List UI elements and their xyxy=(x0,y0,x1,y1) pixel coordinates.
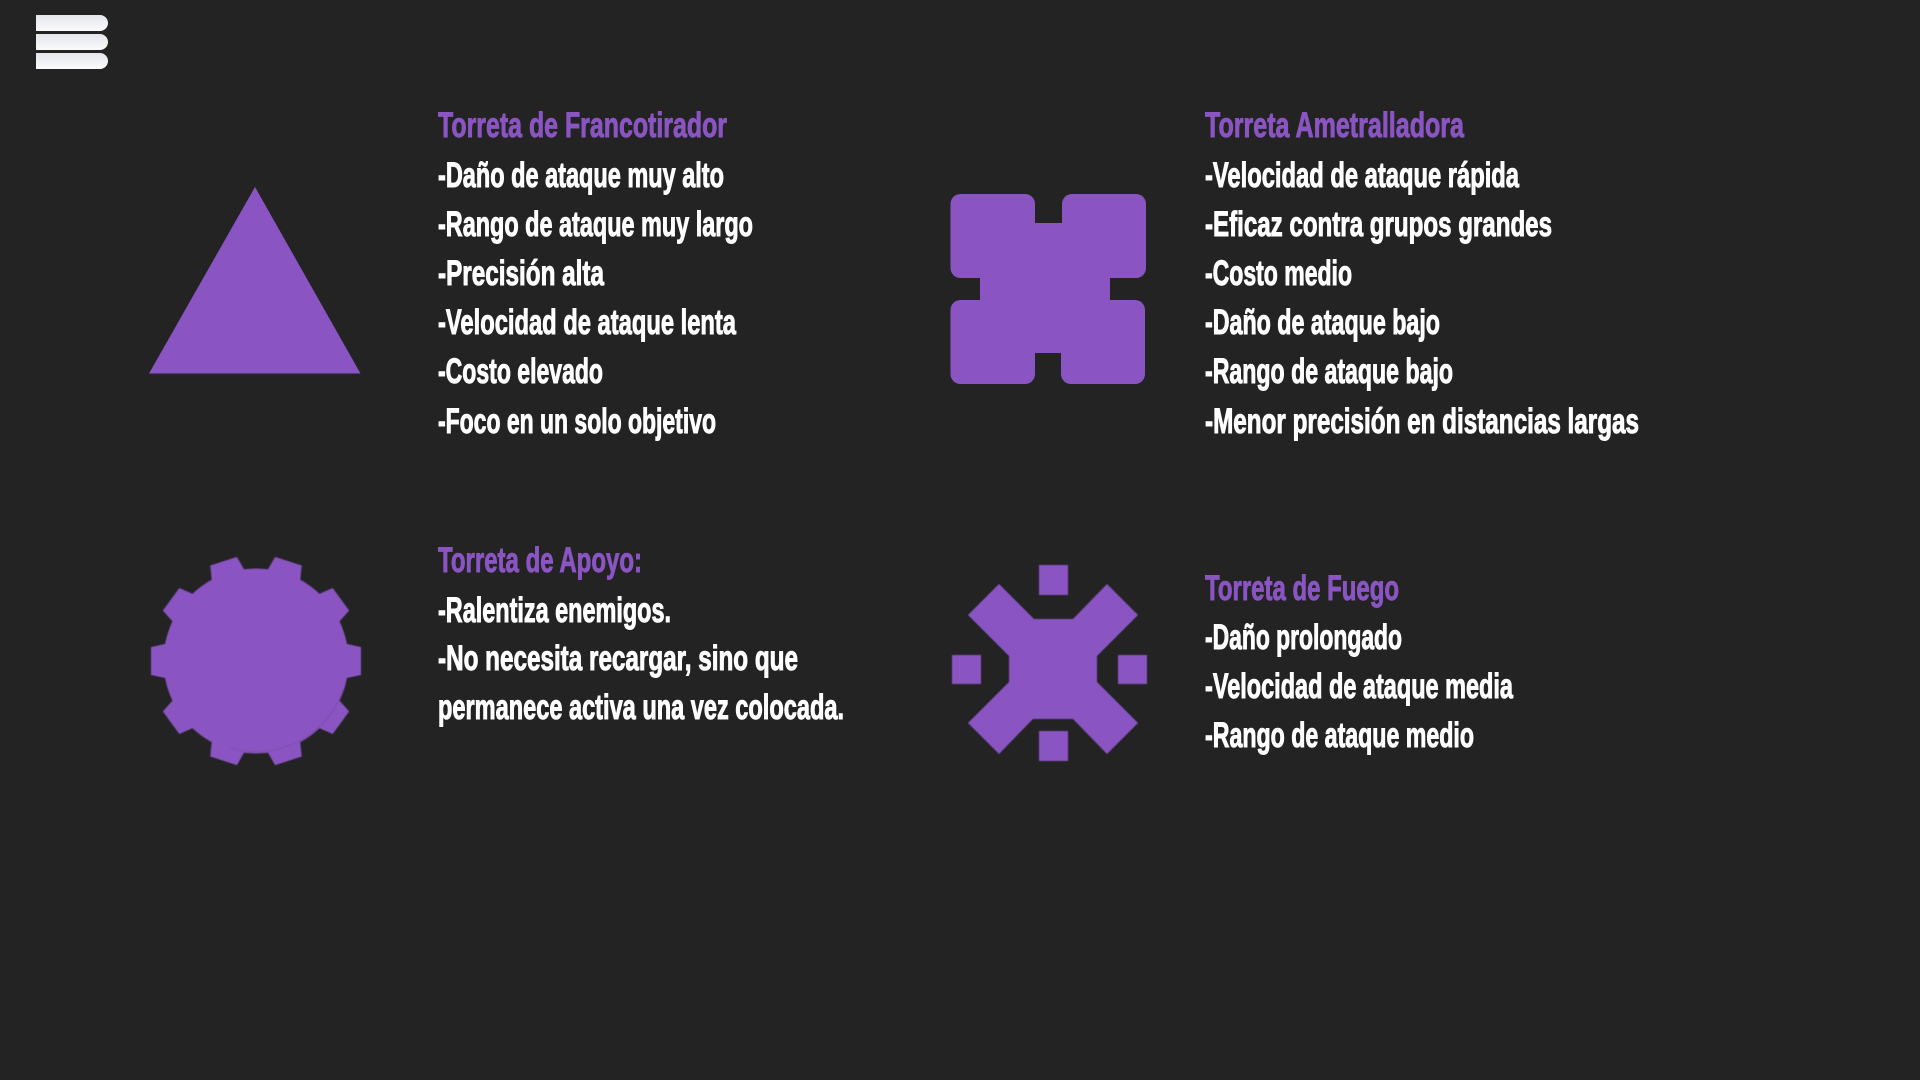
panel: support turret xyxy=(151,541,844,766)
text: machine gun attributes list: -Eficaz contra grupos grandes xyxy=(1205,205,1552,244)
text: support attributes list: -Ralentiza enemigos. xyxy=(438,591,671,630)
panel: machine gun turret xyxy=(950,106,1639,441)
text: sniper attributes list: -Rango de ataque muy largo xyxy=(438,205,753,244)
text: sniper attributes list: -Costo elevado xyxy=(438,352,603,391)
text: machine gun attributes list: -Menor precisión en distancias largas xyxy=(1205,402,1639,441)
text: machine gun attributes list: -Costo medio xyxy=(1205,254,1352,293)
text: fire attributes list: -Rango de ataque medio xyxy=(1205,716,1474,755)
icon: purple triangle xyxy=(149,187,360,374)
icon: gear xyxy=(151,556,361,766)
icon: notched square cross xyxy=(950,194,1146,384)
icon: hamburger menu xyxy=(36,15,108,69)
text: machine gun attributes list: -Velocidad de ataque rápida xyxy=(1205,156,1519,195)
text: support attributes list xyxy=(438,591,844,727)
text: sniper attributes list: -Daño de ataque muy alto xyxy=(438,156,724,195)
heading: Torreta de Apoyo: Torreta de Apoyo: xyxy=(438,541,642,580)
text: machine gun attributes list: -Daño de ataque bajo xyxy=(1205,303,1440,342)
text: support attributes list: permanece activa una vez colocada. xyxy=(438,688,844,727)
text: sniper attributes list: -Foco en un solo objetivo xyxy=(438,402,716,441)
text: machine gun attributes list: -Rango de ataque bajo xyxy=(1205,352,1453,391)
text: support attributes list: -No necesita recargar, sino que xyxy=(438,639,798,678)
panel: fire turret xyxy=(952,565,1513,761)
panel: sniper turret xyxy=(149,106,753,441)
text: fire attributes list: -Daño prolongado xyxy=(1205,618,1402,657)
text: sniper attributes list: -Velocidad de ataque lenta xyxy=(438,303,736,342)
text: fire attributes list xyxy=(1205,618,1513,755)
text: sniper attributes list: -Precisión alta xyxy=(438,254,604,293)
heading: Torreta de Fuego: Torreta de Fuego xyxy=(1205,569,1399,608)
icon: X shape with four squares xyxy=(952,565,1147,761)
heading: Torreta Ametralladora: Torreta Ametralladora xyxy=(1205,106,1464,145)
text: machine gun attributes list xyxy=(1205,156,1639,441)
heading: Torreta de Francotirador: Torreta de Francotirador xyxy=(438,106,727,145)
text: fire attributes list: -Velocidad de ataque media xyxy=(1205,667,1513,706)
text: sniper attributes list xyxy=(438,156,753,441)
